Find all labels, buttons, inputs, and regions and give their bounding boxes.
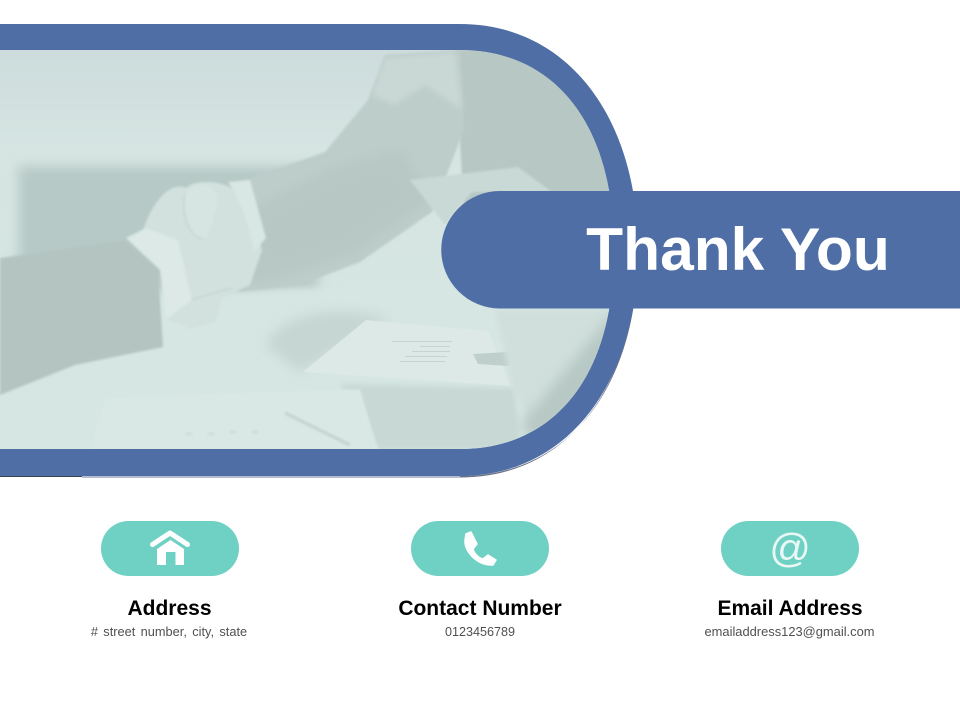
- address detail: # street number, city, state: [91, 624, 247, 639]
- right shirt cuff: [228, 180, 266, 252]
- pen and marks on lower document: [186, 413, 350, 445]
- right jacket sleeve: [238, 50, 464, 292]
- contact detail: 0123456789: [445, 625, 515, 639]
- column: email address: [704, 521, 874, 639]
- lower-left document: [343, 389, 376, 446]
- finger shading: [184, 194, 232, 300]
- title banner: [441, 191, 960, 308]
- address heading: Address: [127, 597, 212, 620]
- title text: Thank You: [586, 215, 890, 283]
- email pill with at-sign icon: [721, 521, 859, 576]
- left jacket sleeve: [0, 240, 163, 395]
- table surface: [282, 290, 610, 449]
- outer blue frame: [0, 24, 638, 478]
- sleeve shadow: [250, 150, 430, 285]
- document chart lines: [392, 341, 452, 362]
- document on table: [303, 320, 511, 386]
- hands clasped: [144, 182, 262, 292]
- contact heading: Contact Number: [398, 597, 562, 620]
- email detail: emailaddress123@gmail.com: [704, 624, 874, 639]
- table below document: [340, 384, 520, 450]
- address pill with house icon: [101, 521, 239, 576]
- contact pill with phone icon: [411, 521, 549, 576]
- thumb: [186, 184, 218, 237]
- photo: handshake over documents: [0, 50, 620, 450]
- dark table reflection: [270, 312, 378, 368]
- shirt shadow: [520, 318, 607, 435]
- left shirt cuff: [126, 228, 192, 320]
- background right panel: [455, 50, 620, 320]
- email pill with at-sign icon: @: [769, 525, 811, 571]
- pen on document: [473, 352, 510, 366]
- sleeve highlight folds: [375, 54, 460, 104]
- column: contact number: [398, 521, 562, 639]
- background wall: [18, 166, 318, 290]
- email heading: Email Address: [717, 597, 863, 620]
- tablet: [410, 167, 552, 225]
- person at right in shirt: [504, 312, 609, 366]
- column: address: [91, 521, 247, 639]
